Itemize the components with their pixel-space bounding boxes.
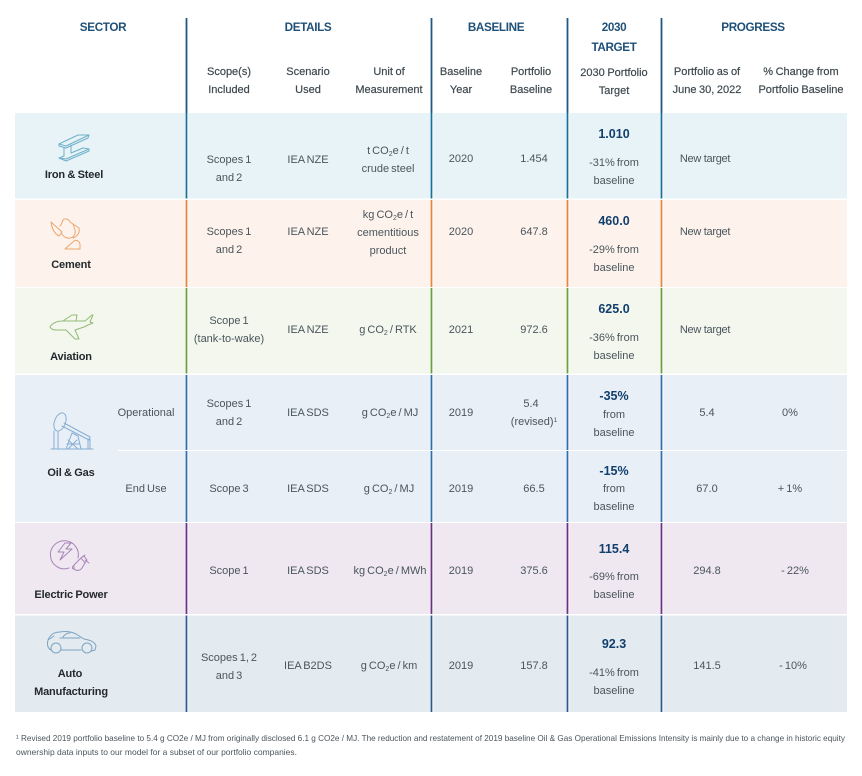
heading: 2030 target: TARGET — [591, 41, 638, 54]
footnote — [16, 733, 846, 757]
cell: unit: / RTK — [388, 324, 417, 336]
panel: iron and steel row — [15, 113, 847, 198]
cell: target — [589, 542, 639, 601]
cell: unit: t CO — [367, 145, 389, 157]
label: aviation: Aviation — [50, 351, 92, 363]
icon: steel beam — [59, 135, 89, 161]
heading: baseline: BASELINE — [468, 21, 525, 34]
cell: target end use: baseline — [594, 501, 634, 513]
cell: scopes: and 2 — [216, 172, 242, 184]
cell: change end use: + 1% — [778, 483, 802, 495]
cell: target: 625.0 — [598, 302, 630, 316]
cell: scopes: Scopes 1, 2 — [201, 652, 257, 664]
cell: scopes operational — [207, 398, 251, 428]
cell: target end use: from — [603, 483, 625, 495]
cell: scenario: IEA NZE — [287, 226, 329, 238]
cell: target: 92.3 — [602, 637, 626, 651]
subheading: portfolio as of: Portfolio as of — [674, 66, 741, 78]
heading: 2030 target — [591, 21, 638, 54]
label: auto manufacturing: Auto — [58, 668, 83, 680]
cell: target: -36% from — [589, 332, 639, 344]
cell: target: baseline — [594, 350, 634, 362]
subheading: unit: Measurement — [355, 84, 423, 96]
cell: scopes operational: and 2 — [216, 416, 242, 428]
cell: progress: New target — [680, 153, 730, 165]
subheading: baseline year: Year — [450, 84, 472, 96]
cell: unit — [357, 209, 419, 257]
cell: baseline year: 2020 — [449, 153, 473, 165]
cell: target operational: from — [603, 409, 625, 421]
cell: change: - 22% — [781, 565, 809, 577]
cell: baseline year: 2019 — [449, 660, 473, 672]
cell: baseline year: 2020 — [449, 226, 473, 238]
cell: portfolio operational: 5.4 — [699, 407, 715, 419]
cell: baseline year: 2021 — [449, 324, 473, 336]
cell: scopes — [207, 154, 251, 184]
subheading: portfolio baseline: Baseline — [510, 84, 552, 96]
icon: cement — [51, 219, 80, 249]
cell: baseline operational: 1 — [554, 417, 558, 424]
cell: baseline operational — [511, 398, 558, 428]
cell: unit: e / MWh — [388, 565, 427, 577]
label: auto manufacturing — [34, 668, 108, 698]
cell: unit: e / t — [397, 209, 413, 221]
cell: scenario: IEA NZE — [287, 154, 329, 166]
cell: scenario: IEA SDS — [287, 565, 329, 577]
cell: unit: kg CO — [353, 565, 384, 577]
cell: unit: product — [370, 245, 406, 257]
cell: scopes: (tank-to-wake) — [194, 333, 264, 345]
subheading: percent change: Portfolio Baseline — [758, 84, 844, 96]
subheading: percent change — [758, 66, 844, 96]
cell: unit end use: 2 — [388, 489, 392, 496]
cell: unit: 2 — [384, 330, 388, 337]
cell: target operational — [594, 389, 634, 439]
subheading: 2030 portfolio target — [580, 67, 648, 97]
cell: scopes — [194, 315, 264, 345]
label: oil and gas: Oil & Gas — [47, 467, 95, 479]
cell: scopes: Scopes 1 — [207, 154, 251, 166]
cell: scopes: Scopes 1 — [207, 226, 251, 238]
cell: portfolio baseline: 647.8 — [520, 226, 548, 238]
cell: unit: 2 — [384, 571, 388, 578]
cell: unit: g CO — [359, 324, 384, 336]
heading: sector: SECTOR — [80, 21, 127, 34]
cell: portfolio baseline: 1.454 — [520, 153, 548, 165]
cell: scenario end use: IEA SDS — [287, 483, 329, 495]
cell: baseline operational: 5.4 — [523, 398, 539, 410]
cell: unit: 2 — [385, 666, 389, 673]
subheading: scenario — [286, 66, 330, 96]
cell: unit: e / km — [389, 660, 417, 672]
cell: unit: crude steel — [362, 163, 414, 175]
cell: unit operational: g CO — [362, 407, 386, 419]
label: cement: Cement — [51, 259, 91, 271]
cell: target: baseline — [594, 175, 634, 187]
cell: scopes: and 3 — [216, 670, 242, 682]
cell: change: - 10% — [779, 660, 807, 672]
cell: unit: 2 — [393, 215, 397, 222]
subheading: unit — [355, 66, 423, 96]
cell: unit — [362, 145, 414, 175]
subheading: baseline year — [440, 66, 482, 96]
label: end use: End Use — [125, 483, 167, 495]
panel: electric power row — [15, 523, 847, 614]
cell: scopes: Scope 1 — [209, 315, 249, 327]
label: auto manufacturing: Manufacturing — [34, 686, 108, 698]
cell: scopes — [201, 652, 257, 682]
cell: scenario: IEA NZE — [287, 324, 329, 336]
subheading: scope: Included — [208, 84, 250, 96]
cell: unit: cementitious — [357, 227, 419, 239]
label: electric power: Electric Power — [34, 589, 108, 601]
cell: scenario: IEA B2DS — [284, 660, 332, 672]
cell: scenario operational: IEA SDS — [287, 407, 329, 419]
cell: unit operational: 2 — [386, 413, 390, 420]
cell: unit: 2 — [389, 151, 393, 158]
cell: target: baseline — [594, 685, 634, 697]
cell: target: baseline — [594, 262, 634, 274]
cell: unit end use: g CO — [364, 483, 388, 495]
cell: target: 115.4 — [599, 542, 629, 556]
cell: unit end use: / MJ — [392, 483, 414, 495]
cell: baseline year: 2019 — [449, 565, 473, 577]
cell: target operational: baseline — [594, 427, 634, 439]
cell: baseline operational: (revised) — [511, 416, 554, 428]
icon: pump jack — [51, 411, 93, 449]
heading: 2030 target: 2030 — [602, 21, 627, 34]
footnote: ¹ Revised 2019 portfolio baseline to 5.4 g CO2e / MJ from originally disclosed 6.1 g CO2e / MJ. The reduction and restatement of 2019 baseline Oil & Gas Operational Emissions Intensity is mainly due to a change in historic equity — [16, 733, 846, 743]
subheading: scope: Scope(s) — [207, 66, 251, 78]
subheading: scenario: Used — [295, 84, 321, 96]
cell: portfolio baseline: 972.6 — [520, 324, 548, 336]
panel: column headers — [80, 18, 844, 113]
subheading: scenario: Scenario — [286, 66, 330, 78]
cell: target: -31% from — [589, 157, 639, 169]
subheading: 2030 portfolio target: Target — [599, 85, 629, 97]
cell: portfolio baseline: 157.8 — [520, 660, 548, 672]
cell: baseline end use: 66.5 — [523, 483, 545, 495]
subheading: percent change: % Change from — [763, 66, 839, 78]
cell: unit: g CO — [361, 660, 385, 672]
cell: target: 460.0 — [598, 214, 630, 228]
subheading: portfolio as of — [673, 66, 741, 96]
cell: progress: New target — [680, 324, 730, 336]
heading: details: DETAILS — [285, 21, 332, 34]
cell: change operational: 0% — [782, 407, 798, 419]
label: iron and steel: Iron & Steel — [45, 169, 103, 181]
label: operational: Operational — [118, 407, 174, 419]
cell: portfolio: 294.8 — [693, 565, 721, 577]
cell: scope: Scope 1 — [209, 565, 249, 577]
cell: portfolio baseline: 375.6 — [520, 565, 548, 577]
icon: car — [47, 632, 96, 653]
icon: electric plug — [50, 541, 89, 570]
cell: scopes operational: Scopes 1 — [207, 398, 251, 410]
cell: target operational: -35% — [599, 389, 629, 403]
cell: target — [589, 637, 639, 697]
cell: progress: New target — [680, 226, 730, 238]
subheading: baseline year: Baseline — [440, 66, 482, 78]
cell: target end use: -15% — [599, 464, 629, 478]
cell: scopes: and 2 — [216, 244, 242, 256]
subheading: portfolio baseline: Portfolio — [511, 66, 551, 78]
cell: target — [589, 214, 639, 274]
cell: target end use — [594, 464, 634, 513]
subheading: 2030 portfolio target: 2030 Portfolio — [580, 67, 648, 79]
cell: portfolio end use: 67.0 — [696, 483, 718, 495]
cell: target: 1.010 — [598, 127, 630, 141]
panel: cement row — [15, 200, 847, 287]
cell: target: -41% from — [589, 667, 639, 679]
panel: aviation row — [15, 288, 847, 374]
cell: portfolio: 141.5 — [693, 660, 721, 672]
cell: year end use: 2019 — [449, 483, 473, 495]
panel: auto manufacturing row — [15, 616, 847, 712]
footnote: ownership data inputs to our model for a subset of our portfolio companies. — [16, 747, 297, 757]
cell: target: -29% from — [589, 244, 639, 256]
cell: target: baseline — [594, 589, 634, 601]
cell: scope end use: Scope 3 — [209, 483, 249, 495]
cell: unit: kg CO — [363, 209, 393, 221]
cell: year operational: 2019 — [449, 407, 473, 419]
cell: scopes — [207, 226, 251, 256]
cell: target — [589, 127, 639, 187]
cell: target: -69% from — [589, 571, 639, 583]
cell: target — [589, 302, 639, 362]
cell: unit operational: e / MJ — [390, 407, 418, 419]
cell: unit: e / t — [393, 145, 409, 157]
icon: airplane — [50, 315, 93, 339]
subheading: portfolio baseline — [510, 66, 552, 96]
subheading: portfolio as of: June 30, 2022 — [673, 84, 741, 96]
subheading: scope — [207, 66, 251, 96]
subheading: unit: Unit of — [373, 66, 406, 78]
panel: oil and gas row — [15, 375, 847, 522]
heading: progress: PROGRESS — [721, 21, 785, 34]
